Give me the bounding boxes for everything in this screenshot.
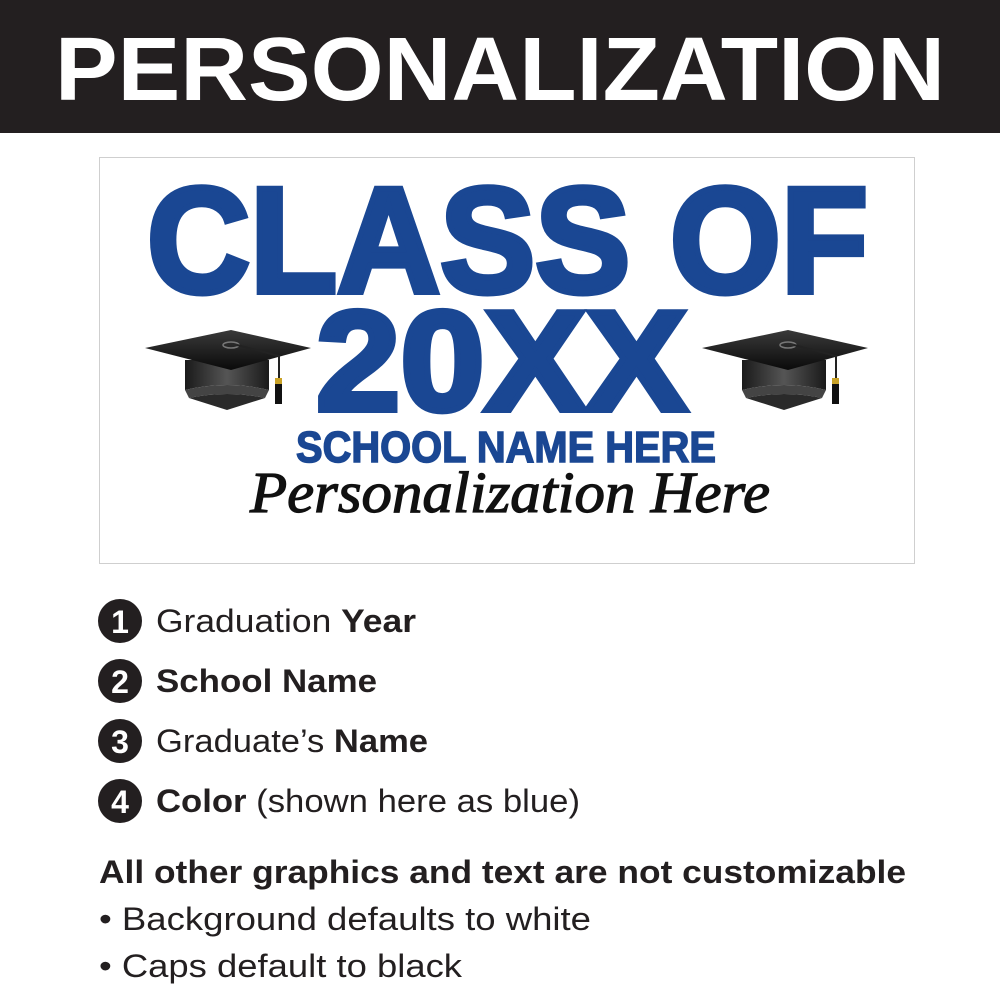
item 2 bbox=[98, 659, 377, 703]
text: school name: SCHOOL NAME HERE bbox=[296, 423, 716, 472]
item 3: 3 bbox=[111, 724, 129, 760]
item 1 bbox=[98, 599, 416, 643]
bullet: caps: • Caps default to black bbox=[99, 948, 463, 984]
note heading: All other graphics and text are not customizable bbox=[99, 854, 906, 890]
item 1: Graduation Year bbox=[156, 603, 416, 639]
panel: banner preview bbox=[100, 156, 914, 564]
item 2: School Name bbox=[156, 663, 377, 699]
text: personalization script: Personalization Here bbox=[249, 460, 770, 525]
icon: right grad cap bbox=[702, 330, 868, 410]
list: personalization options bbox=[98, 599, 580, 823]
bullet: background: • Background defaults to white bbox=[99, 901, 591, 937]
heading: CLASS OF: CLASS OF bbox=[147, 156, 868, 324]
title: PERSONALIZATION bbox=[55, 20, 945, 120]
icon: left grad cap bbox=[145, 330, 311, 410]
header band bbox=[0, 0, 1000, 133]
item 4 bbox=[98, 779, 580, 823]
item 1: 1 bbox=[111, 604, 129, 640]
item 4: 4 bbox=[111, 784, 129, 820]
item 4: Color (shown here as blue) bbox=[156, 783, 580, 819]
item 2: 2 bbox=[111, 664, 129, 700]
heading: 20XX: 20XX bbox=[316, 282, 687, 441]
item 3 bbox=[98, 719, 428, 763]
item 3: Graduate’s Name bbox=[156, 723, 428, 759]
